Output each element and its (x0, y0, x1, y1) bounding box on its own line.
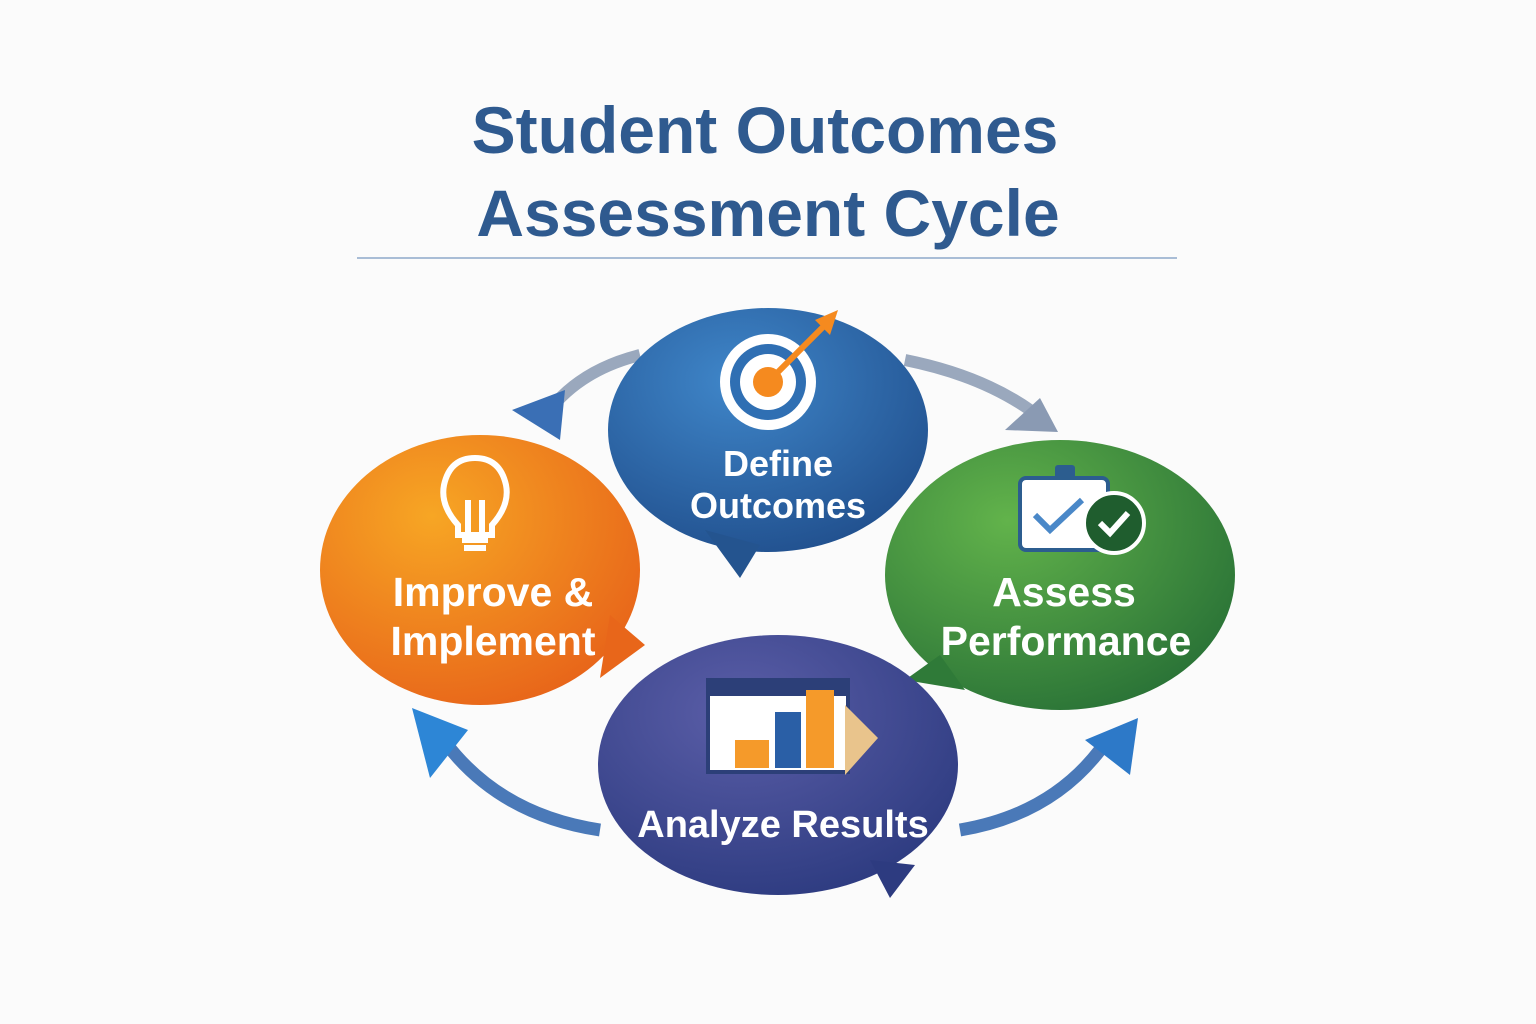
panel: define outcomes: Define (723, 443, 833, 484)
panel: improve & implement (320, 435, 645, 705)
panel: define outcomes: Outcomes (690, 485, 866, 526)
title: Student Outcomes (472, 93, 1058, 167)
icon: light bulb (443, 458, 507, 548)
icon: target (720, 310, 838, 430)
arrow: top left (512, 355, 640, 440)
panel: analyze results (598, 635, 958, 898)
icon: clipboard with check (1020, 465, 1144, 553)
panel: analyze results: Analyze Results (637, 804, 929, 846)
title (472, 93, 1060, 250)
panel: improve & implement: Implement (390, 618, 596, 664)
arrow: bottom right (960, 718, 1138, 830)
panel: assess performance: Performance (941, 618, 1191, 664)
icon: bar chart (708, 680, 878, 775)
arrow: bottom left (412, 708, 600, 830)
panel: assess performance (885, 440, 1235, 710)
panel: assess performance: Assess (992, 569, 1136, 615)
panel: improve & implement: Improve & (393, 569, 593, 615)
title: Assessment Cycle (476, 176, 1060, 250)
arrow: top right (905, 360, 1058, 432)
panel: define outcomes (608, 308, 928, 578)
